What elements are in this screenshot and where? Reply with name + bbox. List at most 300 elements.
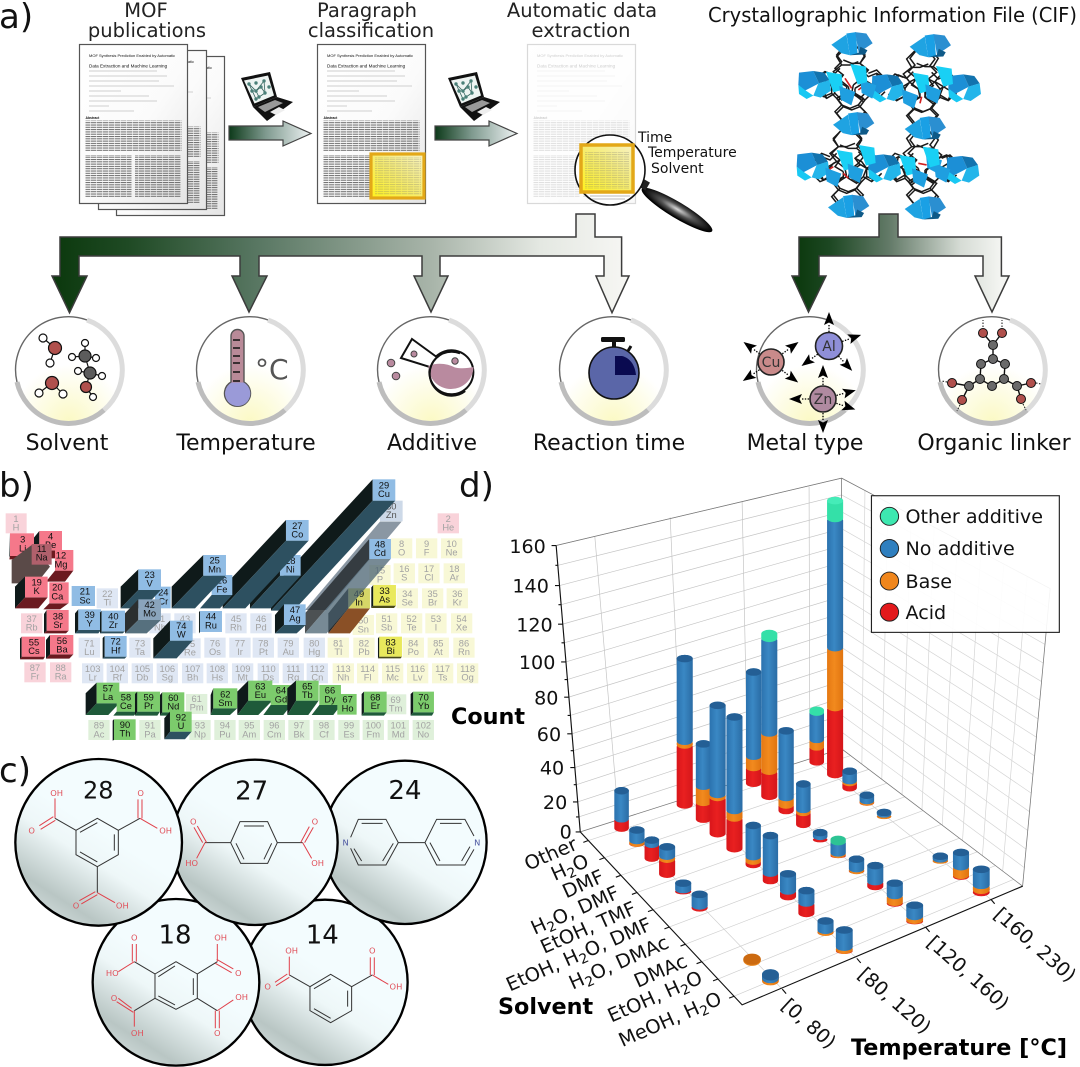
- raised main-group s-block bars: 38: [53, 611, 63, 621]
- axis title: Temperature: Temperature [°C]: [851, 1035, 1067, 1061]
- arrow tree: document to synthesis parameters: [52, 214, 629, 313]
- faded background cells: 100: [366, 721, 381, 731]
- linker 14: [242, 900, 408, 1065]
- faded background cells: [6, 513, 478, 740]
- panel: a) extraction workflow: [0, 0, 1077, 456]
- legend: [871, 496, 1059, 632]
- faded background cells: 1: [13, 514, 19, 524]
- solvent axis tick labels: DMAc: [630, 950, 691, 993]
- faded background cells: 52: [406, 614, 417, 624]
- raised transition-metal bars: Zn: [386, 510, 397, 520]
- linker 28: O: [73, 901, 80, 911]
- raised p-block and group 11-13 bars: As: [379, 595, 390, 605]
- raised main-group s-block bars: K: [34, 586, 41, 596]
- faded background cells: Xe: [456, 623, 467, 633]
- raised lanthanide and actinide bars: 63: [255, 681, 266, 691]
- linker 14: O: [369, 945, 376, 955]
- solvent axis tick labels: EtOH, H: [502, 945, 582, 996]
- raised transition-metal bars: Y: [87, 619, 94, 629]
- faded background cells: 113: [336, 664, 351, 674]
- raised lanthanide and actinide bars: Ho: [342, 703, 354, 713]
- faded background cells: Hg: [308, 647, 320, 657]
- linker 18: OH: [235, 992, 248, 1002]
- solvent axis tick labels: EtOH, TMF: [537, 897, 640, 958]
- raised lanthanide and actinide bars: U: [178, 721, 185, 731]
- faded background cells: H: [13, 523, 19, 533]
- raised transition-metal bars: W: [177, 630, 186, 640]
- raised main-group s-block bars: 19: [31, 577, 42, 587]
- extracted fields: Time: [637, 130, 672, 146]
- faded background cells: I: [435, 623, 437, 633]
- raised transition-metal bars: 74: [176, 621, 187, 631]
- faded background cells: P: [377, 574, 383, 584]
- faded background cells: Re: [184, 648, 196, 658]
- raised main-group s-block bars: Mg: [55, 559, 67, 569]
- heading: Automatic data extraction: extraction: [532, 19, 630, 42]
- faded background cells: 2: [446, 514, 451, 524]
- panel label b: b): [0, 466, 34, 506]
- solvent axis tick labels: [502, 832, 726, 1054]
- raised lanthanide and actinide bars: Ce: [120, 701, 132, 711]
- raised transition-metal bars: Fe: [217, 584, 227, 594]
- raised lanthanide and actinide bars: 59: [143, 692, 154, 702]
- linker 27: OH: [311, 858, 324, 868]
- faded background cells: 94: [220, 721, 230, 731]
- chart grid walls and floor: [556, 478, 1050, 996]
- count axis tick labels: 80: [534, 688, 558, 710]
- faded background cells: Cm: [267, 729, 282, 739]
- raised transition-metal bars: Ni: [286, 565, 295, 575]
- raised lanthanide and actinide bars: 57: [103, 683, 113, 693]
- raised lanthanide and actinide bars: Yb: [418, 701, 429, 711]
- temperature axis tick labels: [120, 160): [922, 931, 1014, 1015]
- solvent axis tick labels: O: [702, 987, 725, 1014]
- count axis tick labels: 20: [543, 792, 567, 814]
- raised transition-metal bars: 72: [110, 637, 121, 647]
- faded background cells: Cl: [425, 573, 433, 583]
- faded background cells: 93: [195, 721, 205, 731]
- faded background cells: Ta: [135, 647, 146, 657]
- axis title: Count: Count: [451, 704, 525, 730]
- raised main-group s-block bars: Cs: [28, 646, 40, 656]
- icon: stopwatch: [560, 317, 666, 423]
- icon: metal type: [740, 312, 863, 433]
- faded background cells: Ar: [450, 573, 459, 583]
- faded background cells: Cn: [311, 673, 323, 683]
- raised transition-metal bars: Mn: [208, 564, 221, 574]
- faded background cells: 88: [55, 663, 66, 673]
- faded background cells: 51: [381, 614, 392, 624]
- faded background cells: F: [424, 548, 430, 558]
- raised main-group s-block bars: Ba: [56, 645, 69, 655]
- arrow tree: CIF to metal and linker: [792, 214, 1009, 312]
- faded background cells: 17: [424, 564, 434, 574]
- raised transition-metal bars: Zr: [109, 620, 118, 630]
- raised main-group s-block bars: 56: [57, 636, 67, 646]
- solvent axis tick labels: 2: [565, 864, 579, 882]
- raised p-block and group 11-13 bars: 33: [379, 586, 390, 596]
- faded background cells: 76: [210, 638, 220, 648]
- linker 18: O: [111, 993, 118, 1003]
- raised main-group s-block bars: [9, 531, 73, 659]
- panel label d: d): [459, 466, 494, 506]
- raised transition-metal bars: 24: [158, 588, 169, 598]
- icon: metal type: Cu: [762, 355, 780, 371]
- linker 18: OH: [131, 1028, 144, 1038]
- faded background cells: Tc: [180, 623, 190, 633]
- raised lanthanide and actinide bars: 66: [325, 686, 335, 696]
- faded background cells: Ac: [94, 729, 105, 739]
- linker 28: OH: [50, 788, 63, 798]
- faded background cells: 61: [191, 694, 202, 704]
- raised p-block and group 11-13 bars: Bi: [386, 646, 395, 656]
- icon: magnifying glass: [575, 135, 716, 238]
- faded background cells: 46: [256, 614, 266, 624]
- temperature axis tick labels: [80, 120): [854, 963, 936, 1038]
- temperature axis tick labels: [160, 230): [989, 903, 1080, 987]
- faded background cells: 104: [110, 664, 125, 674]
- raised lanthanide and actinide bars: 90: [120, 720, 130, 730]
- faded background cells: Sg: [162, 673, 173, 683]
- raised p-block and group 11-13 bars: In: [355, 598, 363, 608]
- faded background cells: 36: [452, 589, 462, 599]
- document: faded extraction page: [528, 44, 636, 204]
- solvent axis tick labels: EtOH, H: [604, 976, 684, 1027]
- faded background cells: 18: [449, 564, 459, 574]
- raised main-group s-block bars: 4: [48, 531, 53, 541]
- heading: MOF publications: publications: [88, 19, 206, 42]
- raised lanthanide and actinide bars: 60: [168, 693, 179, 703]
- faded background cells: 106: [160, 664, 175, 674]
- faded background cells: 69: [390, 695, 401, 705]
- linker 24: N: [474, 837, 480, 847]
- label: Temperature: Temperature: [175, 431, 316, 456]
- faded background cells: At: [434, 647, 443, 657]
- faded background cells: Po: [408, 647, 419, 657]
- raised main-group s-block bars: Na: [36, 553, 48, 563]
- temperature axis tick labels: [0, 80): [777, 994, 841, 1053]
- raised lanthanide and actinide bars: 92: [176, 712, 186, 722]
- icon: flask: [378, 317, 484, 423]
- faded background cells: 45: [231, 614, 241, 624]
- faded background cells: 108: [210, 664, 225, 674]
- faded background cells: 73: [135, 638, 145, 648]
- faded background cells: 101: [391, 721, 406, 731]
- raised transition-metal bars: 39: [84, 610, 95, 620]
- raised p-block and group 11-13 bars: 48: [375, 539, 385, 549]
- icon: solvent: [16, 317, 122, 423]
- heading: CIF: Crystallographic Information File (CIF): [708, 3, 1077, 27]
- raised lanthanide and actinide bars: 64: [276, 686, 286, 696]
- faded background cells: 112: [310, 664, 325, 674]
- raised lanthanide and actinide bars: 62: [220, 689, 231, 699]
- extracted fields: [637, 130, 737, 177]
- faded background cells: 50: [358, 616, 368, 626]
- solvent axis tick labels: O, DMAc: [587, 931, 672, 985]
- faded background cells: 34: [402, 589, 412, 599]
- icon: metal type: Zn: [814, 392, 832, 408]
- faded background cells: 75: [185, 639, 195, 649]
- axes: [552, 546, 1023, 1005]
- panel: c) common linkers: [15, 759, 487, 1066]
- faded background cells: Bh: [187, 673, 198, 683]
- solvent axis tick labels: O, DMF: [581, 913, 655, 962]
- faded background cells: Am: [242, 729, 257, 739]
- axis title: Solvent: Solvent: [498, 994, 594, 1020]
- count axis tick labels: 60: [537, 724, 561, 746]
- faded background cells: 15: [375, 566, 385, 576]
- faded background cells: Au: [283, 647, 294, 657]
- faded background cells: 107: [185, 664, 200, 674]
- faded background cells: 109: [235, 664, 250, 674]
- raised transition-metal bars: 42: [144, 600, 155, 610]
- raised transition-metal bars: 40: [108, 611, 119, 621]
- linker 28: OH: [159, 825, 172, 835]
- linker 27: O: [312, 816, 319, 826]
- raised lanthanide and actinide bars: 68: [370, 692, 380, 702]
- faded background cells: 102: [416, 721, 431, 731]
- linker 28: 28: [83, 776, 114, 804]
- faded background cells: Te: [407, 623, 417, 633]
- faded background cells: 115: [385, 664, 400, 674]
- linker 18: O: [235, 968, 242, 978]
- linker 18: HO: [106, 968, 119, 978]
- raised p-block and group 11-13 bars: 49: [354, 589, 364, 599]
- icon: metal type: Al: [822, 339, 836, 355]
- document: classified paragraph: [318, 44, 426, 204]
- panel: b) periodic table: [6, 479, 478, 741]
- faded background cells: 110: [261, 664, 276, 674]
- label: Additive: Additive: [387, 431, 477, 456]
- faded background cells: 87: [30, 663, 40, 673]
- raised transition-metal bars: Co: [291, 530, 303, 540]
- icon: thermometer: [197, 317, 303, 423]
- solvent axis tick labels: O, DMF: [549, 881, 623, 930]
- extracted fields: Solvent: [651, 161, 704, 177]
- raised transition-metal bars: 44: [206, 612, 216, 622]
- faded background cells: Sb: [381, 623, 392, 633]
- raised lanthanide and actinide bars: Pr: [144, 701, 153, 711]
- raised p-block and group 11-13 bars: [275, 539, 402, 658]
- faded background cells: Np: [194, 729, 206, 739]
- faded background cells: 97: [294, 721, 304, 731]
- raised p-block and group 11-13 bars: Ag: [289, 614, 301, 624]
- faded background cells: 41: [155, 614, 165, 624]
- count axis tick labels: 160: [509, 536, 546, 558]
- faded background cells: Hs: [212, 673, 223, 683]
- icon: organic linker: [939, 317, 1045, 423]
- linker 28: O: [28, 825, 35, 835]
- raised main-group s-block bars: 20: [52, 583, 63, 593]
- label: Organic linker: Organic linker: [917, 431, 1072, 456]
- faded background cells: 114: [360, 664, 375, 674]
- arrow: classification to extraction: [435, 121, 517, 146]
- linker 18: [93, 899, 259, 1066]
- linker 14: O: [264, 981, 271, 991]
- linker 27: HO: [185, 858, 198, 868]
- raised lanthanide and actinide bars: [86, 681, 434, 741]
- raised main-group s-block bars: 12: [56, 551, 66, 561]
- faded background cells: O: [398, 548, 405, 558]
- document stack: MOF publications: [80, 44, 224, 216]
- faded background cells: Kr: [453, 598, 462, 608]
- linker 24: [323, 761, 487, 924]
- faded background cells: Rn: [458, 647, 470, 657]
- raised transition-metal bars: Sc: [80, 595, 91, 605]
- label: Reaction time: Reaction time: [533, 431, 685, 456]
- faded background cells: Tm: [389, 704, 403, 714]
- faded background cells: 111: [286, 664, 300, 674]
- faded background cells: Es: [344, 729, 355, 739]
- linker 24: N: [343, 837, 349, 847]
- solvent axis tick labels: 2: [545, 918, 559, 936]
- raised transition-metal bars: [72, 479, 403, 659]
- faded background cells: Ds: [263, 673, 274, 683]
- faded background cells: 86: [459, 638, 469, 648]
- linker 28: [15, 759, 182, 926]
- raised transition-metal bars: 27: [292, 521, 302, 531]
- raised transition-metal bars: 23: [144, 570, 155, 580]
- raised lanthanide and actinide bars: Gd: [275, 694, 287, 704]
- count axis tick labels: 0: [560, 821, 572, 843]
- temperature axis tick labels: [777, 903, 1080, 1053]
- linker 27: [172, 760, 338, 925]
- faded background cells: 96: [269, 721, 280, 731]
- raised p-block and group 11-13 bars: 83: [385, 637, 396, 647]
- faded background cells: 71: [84, 638, 95, 648]
- raised lanthanide and actinide bars: 67: [342, 695, 353, 705]
- raised lanthanide and actinide bars: Er: [371, 701, 380, 711]
- faded background cells: 91: [145, 721, 155, 731]
- raised transition-metal bars: Mo: [143, 609, 156, 619]
- faded background cells: 16: [399, 564, 409, 574]
- faded background cells: 35: [427, 589, 438, 599]
- linker 18: O: [214, 1028, 221, 1038]
- faded background cells: 103: [85, 664, 100, 674]
- faded background cells: 37: [26, 614, 37, 624]
- linker 24: 24: [388, 776, 421, 806]
- extracted fields: Temperature: [647, 145, 737, 161]
- raised p-block and group 11-13 bars: 47: [290, 605, 300, 615]
- faded background cells: 43: [180, 614, 190, 624]
- raised lanthanide and actinide bars: Dy: [324, 694, 336, 704]
- solvent axis tick labels: MeOH, H: [615, 997, 703, 1052]
- faded background cells: Og: [461, 673, 474, 683]
- faded background cells: Pm: [190, 703, 204, 713]
- faded background cells: Bk: [294, 729, 305, 739]
- faded background cells: 8: [399, 539, 404, 549]
- raised p-block and group 11-13 bars: Cd: [374, 548, 386, 558]
- faded background cells: 78: [258, 638, 269, 648]
- label: Metal type: Metal type: [747, 431, 863, 456]
- solvent axis tick labels: 2: [678, 981, 693, 999]
- raised lanthanide and actinide bars: Eu: [255, 690, 266, 700]
- faded background cells: Rh: [230, 623, 242, 633]
- linker 14: 14: [306, 920, 339, 950]
- faded background cells: 79: [283, 638, 293, 648]
- faded background cells: Fm: [367, 729, 380, 739]
- stacked cylinders: [614, 497, 990, 985]
- faded background cells: Pa: [144, 729, 156, 739]
- faded background cells: 84: [408, 638, 418, 648]
- count axis tick labels: [509, 536, 572, 843]
- faded background cells: 89: [94, 721, 104, 731]
- linker 18: OH: [214, 932, 227, 942]
- faded background cells: 98: [319, 721, 329, 731]
- faded background cells: 105: [135, 664, 150, 674]
- faded background cells: 116: [410, 664, 425, 674]
- raised transition-metal bars: 29: [379, 480, 389, 490]
- faded background cells: 80: [309, 638, 319, 648]
- faded background cells: 77: [235, 638, 245, 648]
- faded background cells: 53: [431, 614, 441, 624]
- legend: Acid: [906, 602, 946, 624]
- linker 14: OH: [390, 981, 402, 991]
- faded background cells: Pd: [255, 623, 267, 633]
- raised transition-metal bars: 30: [386, 501, 396, 511]
- faded background cells: Mc: [386, 673, 399, 683]
- faded background cells: Lr: [89, 673, 97, 683]
- faded background cells: Nb: [154, 623, 166, 633]
- faded background cells: Rf: [113, 673, 122, 683]
- solvent axis tick labels: 2: [577, 950, 591, 968]
- count axis tick labels: 140: [512, 575, 549, 597]
- raised lanthanide and actinide bars: Nd: [167, 702, 179, 712]
- raised main-group s-block bars: Li: [19, 543, 26, 553]
- faded background cells: Os: [209, 647, 221, 657]
- raised lanthanide and actinide bars: Sm: [218, 698, 233, 708]
- solvent axis tick labels: Other: [521, 832, 581, 875]
- heading: Paragraph classification: classification: [308, 19, 434, 42]
- faded background cells: Ne: [446, 548, 458, 558]
- faded background cells: Cf: [319, 729, 329, 739]
- icon: thermometer: °C: [255, 353, 289, 386]
- linker 28: O: [137, 788, 144, 798]
- raised lanthanide and actinide bars: La: [103, 692, 114, 702]
- faded background cells: Nh: [337, 673, 349, 683]
- faded background cells: Pt: [259, 647, 268, 657]
- label: Solvent: Solvent: [26, 431, 109, 456]
- faded background cells: Ts: [438, 673, 448, 683]
- count axis tick labels: 100: [519, 652, 555, 674]
- arrow: publications to classification: [229, 121, 311, 146]
- faded background cells: Md: [392, 729, 405, 739]
- faded background cells: 85: [433, 638, 443, 648]
- solvent axis tick labels: H: [527, 913, 550, 939]
- faded background cells: 95: [244, 721, 255, 731]
- count axis tick labels: 40: [540, 758, 564, 780]
- raised main-group s-block bars: 11: [37, 544, 47, 554]
- raised transition-metal bars: 21: [80, 587, 90, 597]
- raised transition-metal bars: Ru: [205, 620, 217, 630]
- count axis tick labels: 120: [516, 615, 553, 637]
- raised main-group s-block bars: Sr: [53, 620, 63, 630]
- solvent axis tick labels: O: [569, 849, 592, 876]
- raised lanthanide and actinide bars: Tb: [302, 690, 313, 700]
- faded background cells: Ra: [55, 672, 67, 682]
- solvent axis tick labels: H: [547, 859, 570, 886]
- panel: d) 3D stacked bar chart: [502, 478, 1080, 1054]
- faded background cells: Lu: [84, 647, 95, 657]
- raised lanthanide and actinide bars: 70: [418, 692, 429, 702]
- faded background cells: Pu: [219, 729, 231, 739]
- linker 27: O: [190, 816, 197, 826]
- raised main-group s-block bars: Ca: [51, 591, 64, 601]
- linker 14: OH: [285, 945, 298, 955]
- raised transition-metal bars: 25: [209, 556, 220, 566]
- faded background cells: Sn: [358, 624, 369, 634]
- faded background cells: 22: [102, 589, 113, 599]
